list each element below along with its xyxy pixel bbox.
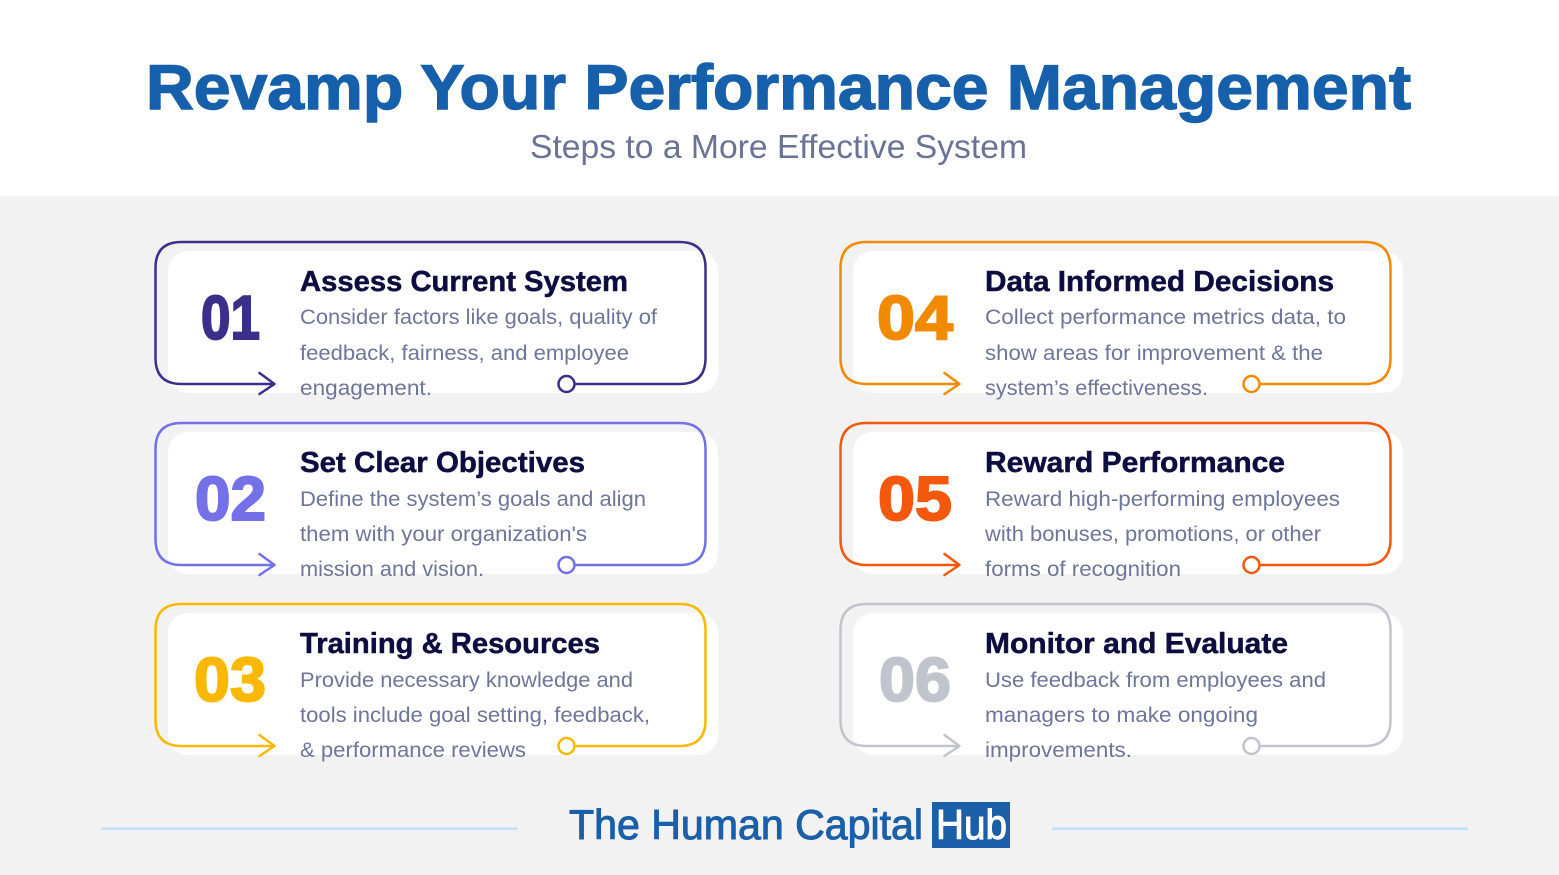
heading: Reward Performance	[985, 447, 1285, 479]
heading: Set Clear Objectives	[300, 447, 585, 479]
heading: Monitor and Evaluate	[985, 628, 1288, 660]
description: mission and vision.	[300, 557, 484, 581]
description: Define the system’s goals and align	[300, 487, 646, 511]
panel: step 03	[156, 604, 718, 762]
subtitle: Steps to a More Effective System	[530, 128, 1027, 165]
description: Consider factors like goals, quality of	[300, 305, 657, 329]
description: improvements.	[985, 738, 1132, 762]
description: engagement.	[300, 376, 432, 400]
description: feedback, fairness, and employee	[300, 341, 629, 365]
heading: Assess Current System	[300, 266, 628, 298]
number 02: 02	[195, 465, 266, 534]
description	[300, 487, 646, 581]
number 05: 05	[878, 465, 952, 534]
number 06: 06	[879, 646, 951, 715]
logo: The Human Capital Hub: Hub	[936, 801, 1007, 848]
number 01: 01	[201, 284, 260, 353]
panel: step 02	[156, 423, 718, 581]
panel: step 05	[840, 423, 1403, 581]
description: & performance reviews	[300, 738, 526, 762]
description	[300, 668, 650, 762]
description: them with your organization's	[300, 522, 587, 546]
title: Revamp Your Performance Management	[146, 53, 1411, 123]
description: tools include goal setting, feedback,	[300, 703, 650, 727]
description: forms of recognition	[985, 557, 1181, 581]
description: Collect performance metrics data, to	[985, 305, 1346, 329]
description: managers to make ongoing	[985, 703, 1258, 727]
panel: step 04	[840, 242, 1403, 400]
panel: step 01	[156, 242, 718, 400]
description: show areas for improvement & the	[985, 341, 1323, 365]
heading: Training & Resources	[300, 628, 600, 660]
description: system’s effectiveness.	[985, 376, 1208, 400]
heading: Data Informed Decisions	[985, 266, 1334, 298]
description	[984, 487, 1340, 581]
description: Use feedback from employees and	[985, 668, 1326, 692]
description	[300, 305, 657, 400]
logo: The Human Capital Hub: The Human Capital	[569, 801, 923, 848]
description	[985, 668, 1326, 762]
description: Reward high-performing employees	[985, 487, 1340, 511]
description: Provide necessary knowledge and	[300, 668, 633, 692]
panel: step 06	[840, 604, 1403, 762]
description: with bonuses, promotions, or other	[984, 522, 1321, 546]
number 03: 03	[194, 646, 266, 715]
number 04: 04	[877, 284, 954, 353]
description	[985, 305, 1346, 400]
